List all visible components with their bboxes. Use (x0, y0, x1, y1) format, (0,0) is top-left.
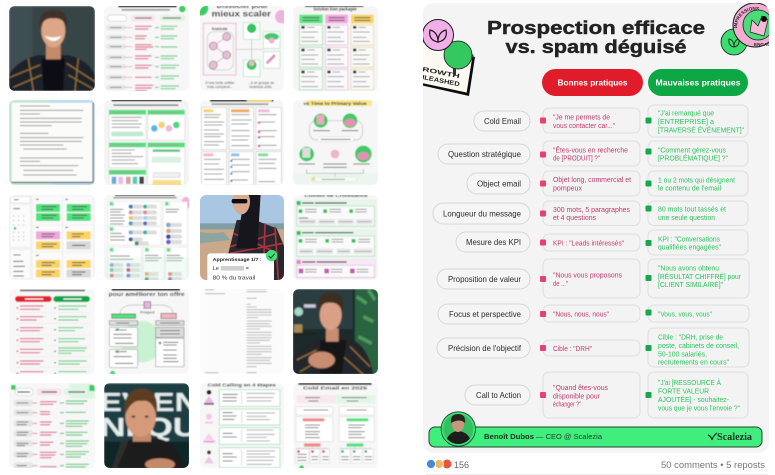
thumbnail: cold calling en 4 étapes: Cold Calling en 4 étapes (207, 382, 276, 387)
thumbnail: objectif table with green stickers (9, 383, 95, 469)
thumbnail: time to primary value (293, 100, 378, 185)
row: proposition de valeur: [CLIENT SIMILAIRE]" (658, 280, 723, 289)
row: proposition de valeur: Proposition de valeur (448, 275, 521, 284)
row: longueur du message (433, 201, 748, 226)
row: cold email (474, 105, 748, 137)
row: call to action: "J'ai [RESSOURCE À (658, 378, 722, 387)
thumbnail: combo de croissance panels (293, 193, 378, 280)
row: cold email: vous contacter car..." (553, 121, 615, 130)
thumbnail: document with text steps (9, 100, 95, 185)
reactions: count and icons (426, 460, 469, 471)
thumbnail: cold email en 2025 comparison: Cold Email en 2025 (303, 386, 367, 392)
title (487, 17, 705, 57)
footer banner: author and logo: Scalezia (717, 432, 752, 443)
thumbnail: close-up photo of man over neon letters (104, 383, 189, 468)
thumbnail: organisation diagram, mieux scaler: mais complexe... (207, 85, 233, 89)
thumbnail: organisation diagram, mieux scaler: Scalezia (212, 26, 228, 31)
header: mauvaises pratiques: Mauvaises pratiques (656, 78, 741, 88)
thumbnail: portrait photo of smiling man (9, 6, 95, 91)
row: précision de l'objectif: 50-100 salariés, (658, 349, 707, 358)
footer banner: author and logo: — CEO @ Scalezia (536, 432, 603, 441)
row: longueur du message: une seule question (658, 213, 715, 222)
icon: impressions engagement badge: IMPRESSIONS (734, 6, 759, 28)
row: object email: Object email (477, 180, 521, 188)
row: proposition de valeur (437, 259, 749, 298)
thumbnail: solution bien packagée grid: Solution bien packagée (313, 7, 357, 12)
row: call to action: "Quand êtes-vous (553, 383, 608, 392)
row: précision de l'objectif: Précision de l'objectif (448, 344, 522, 353)
icon: growth unleashed sticker (420, 20, 475, 96)
row: mesure des KPI: KPI : "Conversations (658, 234, 720, 243)
header: bonnes pratiques (542, 69, 643, 96)
thumbnail: beach photo with Apprentissage card: = (246, 266, 250, 272)
row: call to action: AJOUTÉE] - souhaitez- (658, 395, 729, 404)
thumbnail: beach photo with Apprentissage card: Apprentissage 1/7 : (213, 257, 262, 263)
row: proposition de valeur: de ..." (553, 279, 568, 288)
thumbnail: photo of man speaking in front of plants (293, 289, 379, 374)
row: object email: 1 ou 2 mots qui désignent (658, 175, 736, 184)
header: bonnes pratiques: Bonnes pratiques (558, 78, 628, 88)
row: question stratégique: "Comment gérez-vous (658, 146, 726, 155)
row: précision de l'objectif: recrutements en cours" (658, 358, 729, 367)
row: cold email: Cold Email (484, 117, 521, 126)
row: longueur du message: et 4 questions (553, 213, 596, 222)
row: call to action: vous que je vous l'envoie ?" (658, 403, 740, 412)
row: call to action: disponible pour (553, 391, 600, 400)
row: cold email: [ENTREPRISE] a (658, 117, 715, 126)
comments and reposts count: 50 comments • 5 reposts (661, 460, 765, 471)
row: mesure des KPI: KPI : "Leads intéressés" (553, 238, 624, 247)
thumbnail: beach photo with Apprentissage card: Le (213, 266, 219, 272)
thumbnail: solution bien packagée grid (293, 5, 378, 91)
thumbnail: organisation diagram, mieux scaler: D'une boîte unifiée (206, 81, 235, 85)
title: vs. spam déguisé (506, 36, 686, 57)
thumbnail: cold email en 2025 comparison (293, 383, 378, 470)
row: call to action: Call to Action (476, 391, 521, 400)
row: focus et perspective: "Nous, nous, nous" (553, 310, 609, 319)
row: précision de l'objectif (437, 328, 749, 367)
thumbnail: organisation diagram, mieux scaler: business units. (249, 85, 273, 89)
reactions: count and icons: 156 (454, 460, 469, 471)
row: call to action: FORTE VALEUR (658, 387, 709, 396)
row: question stratégique: "Êtes-vous en recherche (553, 146, 628, 155)
row: object email: Objet long, commercial et (553, 175, 632, 184)
row: call to action (465, 372, 748, 418)
row: longueur du message: Longueur du message (443, 210, 521, 218)
thumbnail: time to primary value: vs Time to Primary Value (303, 101, 367, 107)
row: question stratégique: [PROBLÉMATIQUE] ?" (658, 154, 728, 163)
row: object email (467, 171, 748, 196)
thumbnail: channel panels with blue icons (104, 194, 193, 281)
thumbnail: améliorer ton offre flowchart: pour améliorer ton offre (109, 292, 185, 298)
thumbnail: process panels with green headers (104, 99, 189, 186)
row: question stratégique: de [PRODUIT] ?" (553, 154, 600, 163)
row: mesure des KPI: Mesure des KPI (466, 238, 521, 247)
thumbnail: améliorer ton offre flowchart: Prospect (140, 310, 155, 314)
panel: main infographic card (423, 3, 769, 453)
title: Prospection efficace (487, 17, 705, 38)
thumbnail: améliorer ton offre flowchart (108, 289, 186, 374)
icon: impressions engagement badge: ENGAG (754, 42, 771, 47)
row: longueur du message: 80 mots tout tassés et (658, 205, 727, 214)
row: call to action: échanger ?" (553, 400, 581, 409)
row: question stratégique (438, 141, 748, 166)
row: cold email: [TRAVERSÉ ÉVÉNEMENT]" (658, 125, 744, 134)
thumbnail: organisation diagram, mieux scaler (200, 6, 284, 90)
thumbnail: close-up photo of man over neon letters: EVIEN (100, 387, 198, 417)
header: mauvaises pratiques (648, 69, 748, 96)
row: object email: pompeux (553, 184, 582, 193)
row: focus et perspective (438, 304, 749, 324)
row: précision de l'objectif: Cible : "DRH, prise de (658, 332, 723, 342)
thumbnail: comparison table with rows (104, 5, 189, 91)
icon: growth unleashed sticker: ILEASHED (422, 74, 461, 88)
footer banner: author and logo (429, 412, 762, 447)
thumbnail: objections table red and green (14, 289, 91, 374)
row: précision de l'objectif: poste, cabinets de conseil, (658, 341, 739, 350)
row: focus et perspective: "Vous, vous, vous" (658, 309, 712, 318)
thumbnail: beach photo with Apprentissage card (200, 195, 284, 280)
thumbnail: combo de croissance panels: Combo de Croissance (304, 193, 368, 199)
row: cold email: "J'ai remarqué que (658, 108, 714, 118)
row: proposition de valeur: "Nous vous proposons (553, 271, 622, 280)
row: longueur du message: 300 mots, 5 paragraphes (553, 205, 630, 214)
thumbnail: close-up photo of man over neon letters: NI QU (100, 412, 198, 442)
row: précision de l'objectif: Cible : "DRH" (553, 344, 592, 353)
row: mesure des KPI: qualifiées engagées" (658, 242, 721, 251)
row: focus et perspective: Focus et perspective (449, 310, 521, 319)
thumbnail: cold calling en 4 étapes (199, 382, 285, 469)
thumbnail: step cards with coloured tags (200, 99, 284, 185)
row: object email: le contenu de l'email (658, 184, 721, 193)
thumbnail: weekly content calendar (9, 195, 95, 280)
thumbnail: plain text document (204, 289, 272, 374)
thumbnail: beach photo with Apprentissage card: 80 % du travail (213, 275, 255, 281)
thumbnail: organisation diagram, mieux scaler: ...à un groupe de (248, 81, 274, 85)
row: question stratégique: Question stratégique (448, 150, 521, 159)
footer banner: author and logo: Benoît Dubos (484, 432, 534, 441)
row: proposition de valeur: [RÉSULTAT CHIFFRÉ] pour (658, 272, 741, 281)
row: proposition de valeur: "Nous avons obtenu (658, 264, 719, 272)
thumbnail: organisation diagram, mieux scaler: Dissocier pour (217, 1, 268, 10)
icon: growth unleashed sticker: ROWTH (422, 66, 461, 80)
row: cold email: "Je me permets de (553, 112, 610, 122)
icon: impressions engagement badge (720, 3, 769, 56)
thumbnail: organisation diagram, mieux scaler: mieux scaler (212, 9, 272, 19)
row: mesure des KPI (456, 230, 748, 255)
